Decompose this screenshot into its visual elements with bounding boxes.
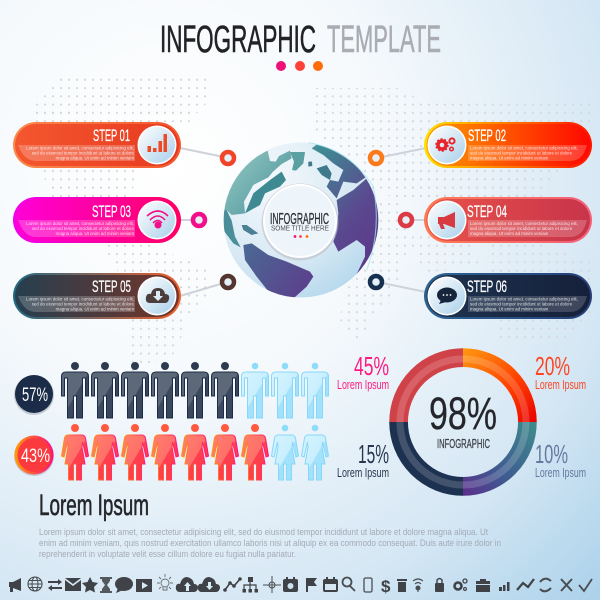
- panel: step 02: Lorem ipsum dolor sit amet, consectetur adipisicing elit,: [470, 146, 578, 150]
- globe centre disc: [262, 184, 338, 260]
- women pictogram row: [62, 424, 328, 480]
- panel: step 05: sed do eiusmod tempor incididunt ut labore et dolore: [32, 302, 135, 306]
- body paragraph: reprehenderit in voluptate velit esse cillum dolore eu fugiat nulla pariatur.: [39, 549, 296, 560]
- stat: 15%: 15%: [358, 439, 389, 469]
- globe: [224, 142, 378, 298]
- icon: cloud download: [198, 577, 220, 592]
- icon: wifi: [147, 211, 168, 228]
- icon: mail: [65, 578, 81, 591]
- panel: step 06: [424, 273, 592, 319]
- men pictogram row: [62, 362, 328, 418]
- icon: flag: [306, 578, 317, 592]
- icon row: [9, 574, 592, 596]
- icon: calendar money: [283, 577, 298, 592]
- panel: step 01: magna aliqua. Ut enim ad minim veniam: [56, 156, 134, 160]
- panel: step 01: STEP 01: [93, 127, 130, 145]
- icon: gears: [454, 579, 467, 590]
- icon: crosshair: [263, 576, 281, 593]
- connector rings: [193, 152, 412, 288]
- panel: step 04: Lorem ipsum dolor sit amet, consectetur adipisicing elit,: [470, 221, 578, 226]
- title dots: [276, 61, 323, 71]
- panel: step 05: Lorem ipsum dolor sit amet, consectetur adipisicing elit,: [26, 296, 134, 302]
- icon: chat bubble: [437, 288, 457, 304]
- icon: trash: [397, 579, 407, 592]
- heading: Lorem Ipsum: Lorem Ipsum: [39, 489, 149, 522]
- panel: step 01: sed do eiusmod tempor incididunt ut labore et dolore: [32, 150, 135, 156]
- stat: 15%: Lorem Ipsum: [337, 465, 389, 480]
- globe centre disc: INFOGRAPHIC: [270, 211, 329, 228]
- icon: bar chart: [148, 134, 167, 152]
- panel: step 03: Lorem ipsum dolor sit amet, consectetur adipisicing elit,: [26, 221, 134, 226]
- stat: 45%: [337, 351, 389, 392]
- panel: step 02: sed do eiusmod tempor incididunt ut labore et dolore: [470, 150, 573, 156]
- stat: 45%: Lorem Ipsum: [337, 377, 389, 392]
- donut label: [429, 388, 497, 451]
- icon: lock: [435, 578, 444, 592]
- icon: trend up: [517, 579, 534, 590]
- icon: calendar: [323, 577, 338, 592]
- donut chart: [399, 358, 527, 486]
- icon: star: [82, 577, 98, 592]
- icon: search: [342, 578, 355, 591]
- panel: step 01: Lorem ipsum dolor sit amet, consectetur adipisicing elit,: [26, 146, 134, 150]
- continents: [224, 142, 378, 298]
- panel: step 03: sed do eiusmod tempor incididunt ut labore et dolore: [32, 226, 135, 231]
- icon: arrows: [48, 579, 62, 591]
- badge: 43%: 43%: [21, 446, 50, 467]
- badge: 57%: [14, 375, 54, 415]
- panel: step 05: [13, 273, 181, 319]
- panel: step 02: magna aliqua. Ut enim ad minim veniam: [470, 156, 549, 160]
- badge: 57%: 57%: [22, 385, 48, 406]
- stat: 45%: 45%: [354, 351, 389, 381]
- body paragraph: enim ad minim veniam, quis nostrud exercitation ullamco laboris nisi ut aliquip ex ea commodo consequat. Duis aute irure dolor in: [39, 538, 501, 549]
- icon: cloud upload: [176, 577, 198, 592]
- panel: step 06: sed do eiusmod tempor incididunt ut labore et dolore: [470, 302, 573, 306]
- panel: step 03: magna aliqua. Ut enim ad minim veniam: [56, 231, 134, 236]
- stat: 20%: 20%: [535, 351, 570, 381]
- icon: bars: [499, 582, 510, 591]
- title: INFOGRAPHIC: [160, 19, 316, 61]
- panel: step 03: [13, 197, 181, 243]
- dotted world map: [34, 78, 592, 372]
- donut label: 98%: [429, 388, 497, 439]
- icon: cross: [561, 579, 572, 591]
- icon: megaphone: [438, 212, 455, 229]
- icon: refresh: [540, 579, 551, 591]
- icon: globe: [28, 577, 42, 591]
- panel: step 04: [424, 197, 592, 243]
- icon: phone: [364, 578, 372, 592]
- panel: step 06: STEP 06: [467, 278, 507, 296]
- panel: step 06: Lorem ipsum dolor sit amet, consectetur adipisicing elit,: [470, 296, 578, 302]
- panel: step 04: sed do eiusmod tempor incididunt ut labore et dolore: [470, 226, 573, 231]
- panel: step 02: [424, 122, 592, 168]
- panel: step 04: STEP 04: [467, 203, 507, 221]
- panel: step 06: magna aliqua. Ut enim ad minim veniam: [470, 306, 549, 312]
- icon: chat: [115, 577, 133, 593]
- panel: step 05: STEP 05: [92, 278, 131, 296]
- panel: step 04: magna aliqua. Ut enim ad minim veniam: [470, 231, 549, 236]
- body paragraph: Lorem ipsum dolor sit amet, consectetur adipisicing elit, sed do eiusmod tempor incididunt ut labore et dolore magna aliqua. Ut: [39, 527, 488, 538]
- panel: step 01: [13, 122, 181, 168]
- body paragraph: [39, 527, 501, 560]
- icon: line graph: [223, 577, 242, 592]
- icon: cloud download: [146, 288, 169, 303]
- title: TEMPLATE: [327, 19, 441, 61]
- badge: 43%: [14, 436, 54, 476]
- panel: step 03: STEP 03: [92, 203, 131, 221]
- panel: step 05: magna aliqua. Ut enim ad minim veniam: [56, 306, 134, 312]
- icon: megaphone: [9, 578, 21, 592]
- icon: bulb: [157, 574, 173, 590]
- icon: gears: [436, 138, 455, 151]
- icon: video: [136, 579, 152, 592]
- donut label: INFOGRAPHIC: [437, 436, 490, 451]
- panel: step 02: STEP 02: [468, 127, 506, 145]
- icon: hierarchy: [242, 577, 258, 592]
- stat: 10%: 10%: [535, 439, 568, 469]
- icon: briefcase: [476, 579, 490, 592]
- globe centre disc: SOME TITLE HERE: [271, 224, 329, 232]
- icon: dollar: $: [381, 577, 391, 596]
- icon: check: [579, 579, 592, 591]
- icon: wifi: [413, 579, 423, 592]
- connector lines: [180, 148, 426, 296]
- stat: 15%: [337, 439, 389, 480]
- icon: hourglass: [100, 577, 112, 593]
